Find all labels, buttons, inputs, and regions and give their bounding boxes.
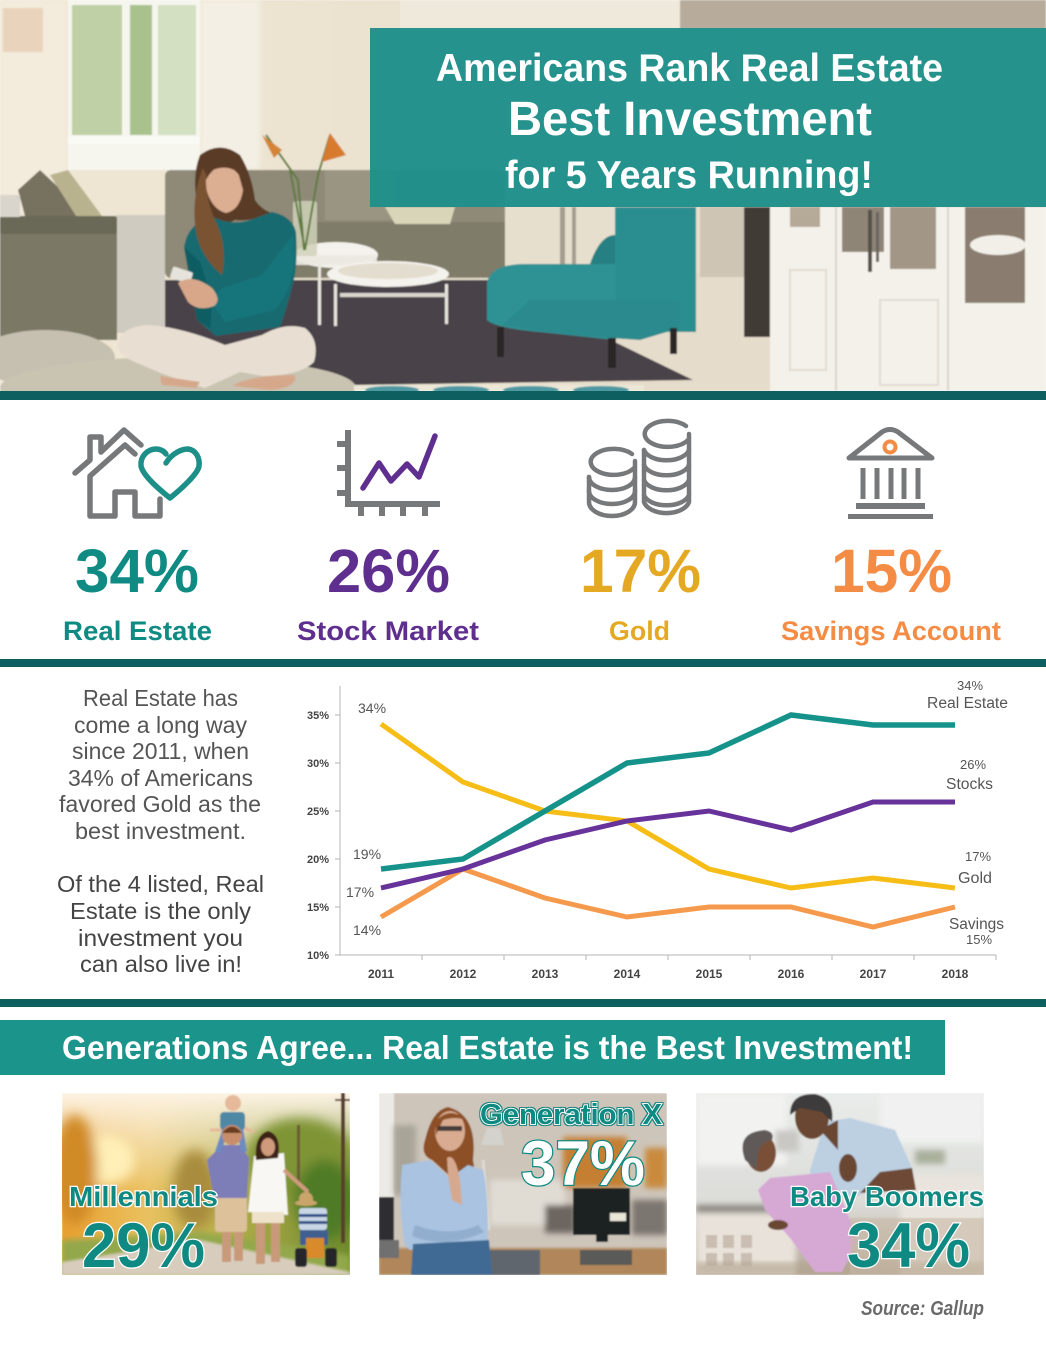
woman with glasses	[401, 1107, 492, 1275]
stat: savings account: 15%	[831, 537, 952, 605]
father and baby	[207, 1095, 254, 1262]
text block: real estate history: favored Gold as the	[59, 791, 261, 817]
photo panel: generation x: Generation X	[480, 1099, 663, 1131]
text block: only investment you can live in	[57, 871, 264, 977]
text block: real estate history: best investment.	[75, 818, 246, 844]
photo panel: millennials: 29%	[82, 1211, 205, 1281]
x axis labels: 2017	[860, 967, 887, 981]
teal chair	[487, 207, 696, 368]
y axis labels: 20%	[307, 854, 329, 866]
series: savings	[381, 869, 955, 927]
icon: coin stacks	[589, 421, 689, 516]
stat: stock market	[297, 430, 479, 646]
photo panel: baby boomers: 34%	[847, 1211, 970, 1281]
icon: line chart	[337, 430, 440, 516]
vase with flowers	[293, 201, 317, 256]
title banner: for 5 Years Running!	[505, 154, 873, 197]
stat: real estate	[63, 430, 212, 646]
photo panel: millennials	[53, 1093, 355, 1281]
rug	[118, 280, 693, 385]
photo panel: generation x: 37%	[521, 1129, 645, 1199]
data labels: 15%	[966, 932, 992, 947]
generations banner	[0, 1020, 945, 1075]
data labels: 17%	[346, 884, 374, 900]
series: real estate	[381, 715, 955, 869]
generations banner: Generations Agree... Real Estate is the Best Investment!	[62, 1029, 913, 1066]
x axis labels: 2012	[450, 967, 477, 981]
doors	[770, 207, 1046, 391]
data labels: 17%	[965, 849, 991, 864]
stat: gold: Gold	[609, 616, 670, 646]
data labels: Stocks	[946, 776, 993, 793]
dancing man	[790, 1094, 916, 1200]
stat: stock market: 26%	[327, 537, 450, 605]
title banner	[370, 28, 1046, 207]
y axis labels: 35%	[307, 710, 329, 722]
title banner: Best Investment	[508, 93, 872, 146]
ottomans	[0, 330, 115, 386]
data labels: 34%	[957, 678, 983, 693]
data labels: 19%	[353, 846, 381, 862]
text block: only investment you can live in: can also live in!	[80, 951, 242, 977]
y axis labels: 15%	[307, 902, 329, 914]
title banner: Americans Rank Real Estate	[436, 47, 943, 90]
stat: savings account	[781, 430, 1001, 646]
coffee tables	[294, 242, 378, 268]
lamp	[483, 1160, 489, 1230]
x axis labels	[368, 967, 969, 981]
photo panel: millennials: Millennials	[69, 1181, 218, 1212]
data labels: Real Estate	[927, 695, 1008, 712]
left sofa	[115, 215, 165, 333]
photo panel: baby boomers	[696, 1093, 984, 1281]
data labels	[346, 678, 1008, 947]
text block: real estate history: come a long way	[74, 712, 247, 738]
dancing woman	[742, 1130, 984, 1275]
rug strip	[354, 385, 644, 391]
stat: gold	[580, 421, 701, 646]
text block: real estate history: 34% of Americans	[68, 765, 253, 791]
text block: real estate history: Real Estate has	[83, 685, 238, 711]
data labels: 14%	[353, 922, 381, 938]
photo panel: baby boomers: Baby Boomers	[790, 1181, 984, 1212]
series: gold	[381, 724, 955, 888]
x axis labels: 2011	[368, 967, 394, 981]
source note: Source: Gallup	[861, 1298, 984, 1320]
stat: real estate: 34%	[75, 537, 199, 605]
data labels: 34%	[358, 700, 386, 716]
sofa back	[165, 170, 505, 278]
x axis labels: 2016	[778, 967, 805, 981]
text block: only investment you can live in: investment you	[78, 925, 243, 951]
photo panel: generation x	[379, 1093, 667, 1275]
y axis labels: 10%	[307, 950, 329, 962]
stat: savings account: Savings Account	[781, 616, 1001, 646]
line chart: investment preference 2011 to 2018	[307, 678, 1008, 981]
text block: real estate history	[59, 685, 261, 844]
icon: bank	[848, 430, 933, 519]
data labels: 26%	[960, 757, 986, 772]
y axis labels: 25%	[307, 806, 329, 818]
woman	[118, 148, 316, 390]
stat: real estate: Real Estate	[63, 616, 212, 646]
text block: only investment you can live in: Estate is the only	[70, 898, 252, 924]
stat: gold: 17%	[580, 537, 701, 605]
icon: house with heart	[75, 430, 199, 516]
mother	[248, 1131, 308, 1264]
y axis labels	[307, 710, 329, 962]
hero photo: living room with woman on phone	[0, 0, 1046, 419]
y axis labels: 30%	[307, 758, 329, 770]
data labels: Gold	[958, 870, 992, 887]
x axis labels: 2018	[942, 967, 969, 981]
x axis labels: 2015	[696, 967, 723, 981]
data labels: Savings	[949, 916, 1004, 933]
child on toy tractor	[295, 1192, 337, 1267]
series: stocks	[381, 802, 955, 888]
x axis labels: 2013	[532, 967, 559, 981]
text block: only investment you can live in: Of the 4 listed, Real	[57, 871, 264, 897]
stat: stock market: Stock Market	[297, 616, 479, 646]
text block: real estate history: since 2011, when	[72, 738, 249, 764]
x axis labels: 2014	[614, 967, 641, 981]
